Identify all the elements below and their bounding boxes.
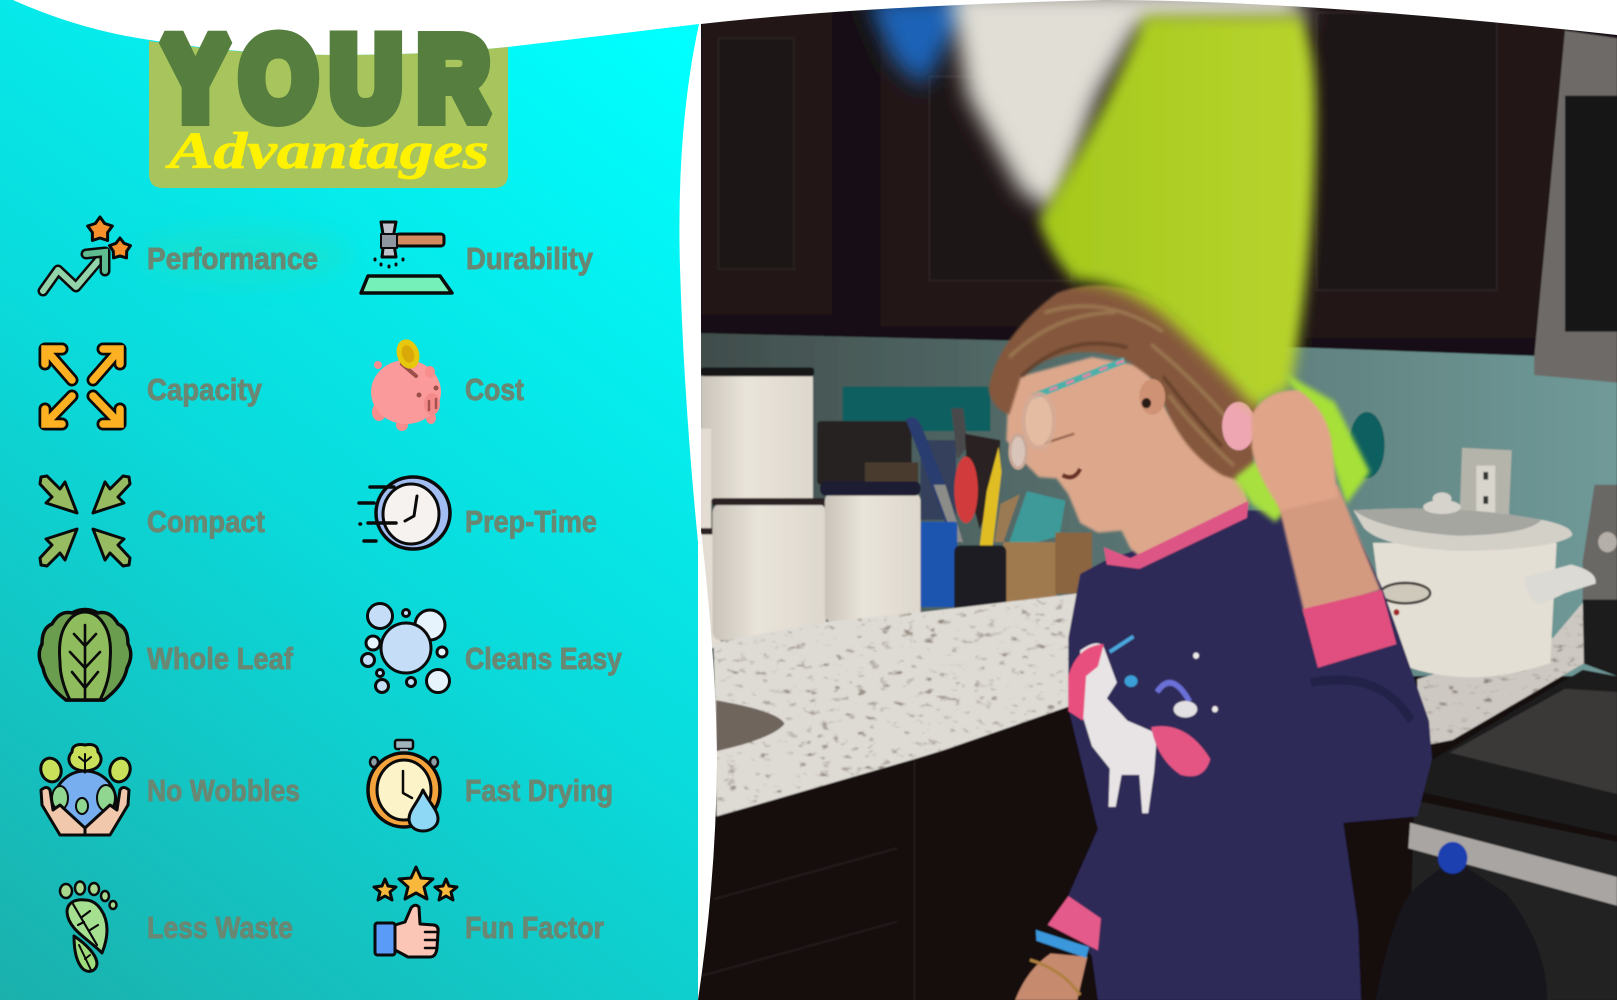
icon: hammer on anvil [361,222,452,293]
icon: expand arrows [45,349,120,424]
heading: Your Advantages [149,13,508,188]
label: No Wobbles: No Wobbles [147,773,300,808]
item: Compact [40,476,265,566]
icon: earth in hands [38,745,133,835]
girl: glasses, ear, scrunchie [1010,360,1255,468]
girl: left sleeve and torso [1062,510,1432,1000]
label: Fun Factor: Fun Factor [465,910,604,945]
heading backing plate [149,41,508,188]
item: Less Waste [60,882,293,971]
label: Less Waste: Less Waste [147,910,293,945]
photo: girl in kitchen waving a green colander [678,0,1617,1000]
countertop [714,593,1092,816]
label: Cleans Easy: Cleans Easy [465,641,623,676]
label: Durability: Durability [466,241,594,276]
label: Capacity: Capacity [147,372,263,407]
icon: leaf footprint [60,882,116,971]
sink [716,700,785,751]
girl: cuffs and bracelets [1015,896,1101,1000]
brush texture behind Performance [140,227,350,283]
item: Whole Leaf [39,610,294,700]
heading word: YOUR: YOUR [163,13,489,143]
icon: stopwatch with drop [368,740,440,831]
item: Performance [43,217,318,291]
item: Prep-Time [359,477,597,549]
girl: unicorn print [1068,637,1218,813]
label: Compact: Compact [147,504,265,539]
item: Durability [361,222,594,293]
hanging towel [1376,842,1547,1000]
icon: piggy bank [371,336,441,431]
cutting boards and dark block [817,387,990,485]
label: Whole Leaf: Whole Leaf [147,641,294,676]
label: Prep-Time: Prep-Time [465,504,597,539]
item: Capacity [45,349,263,424]
stove [1340,485,1617,1000]
icon: soap bubbles [362,604,450,692]
item: No Wobbles [38,745,300,835]
slow cooker [1353,492,1596,677]
label: Cost: Cost [465,372,524,407]
backsplash wall [690,333,1617,676]
item: Fast Drying [368,740,613,831]
microwave [1534,31,1617,383]
girl: neck and face [1006,357,1249,569]
icon: rising arrow with stars [43,217,130,291]
green colander: motion-blurred [867,0,1370,522]
outlet [1460,448,1512,517]
photo base [678,0,1617,1000]
icon: stars and thumbs up [374,867,457,957]
item: Fun Factor [374,867,604,957]
lower cabinets [696,707,1104,1000]
label: Fast Drying: Fast Drying [465,773,613,808]
label: Performance: Performance [147,241,318,276]
upper cabinets [690,0,1617,364]
item: Cleans Easy [362,604,623,692]
panel: advantages background [0,0,699,1000]
girl: raised forearm and hand [1252,390,1396,668]
teal bowl behind hand [1349,412,1385,478]
item: Cost [371,336,524,431]
girl: hair [989,285,1258,485]
icon: lettuce leaf [39,610,131,700]
white canisters [699,367,921,648]
heading word: Advantages: Advantages [165,123,489,180]
utensils and holder [906,408,1092,614]
icon: compress arrows [40,476,130,566]
icon: fast clock [359,477,450,549]
